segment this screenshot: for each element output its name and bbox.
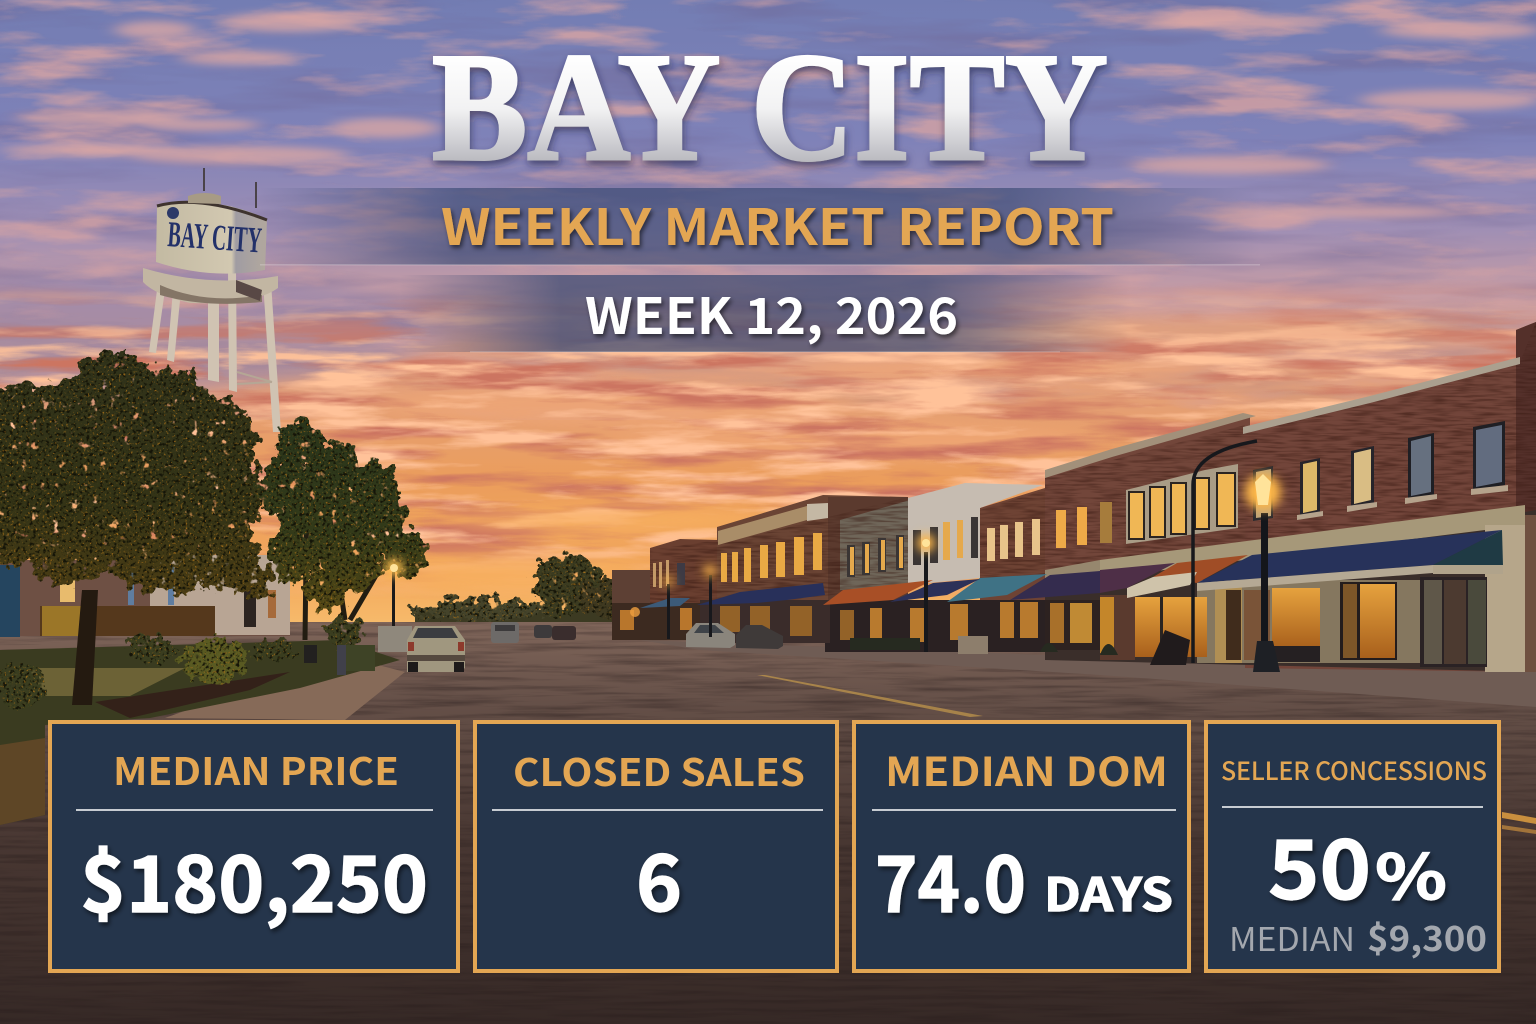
sign block details [718, 503, 828, 582]
week label: WEEK 12, 2026 [585, 277, 958, 349]
value: seller concessions [1268, 804, 1447, 923]
panel: median price [50, 722, 458, 971]
subtitle: WEEKLY MARKET REPORT [441, 188, 1114, 260]
buildings on right [612, 322, 1536, 672]
median concession: $9,300 [1367, 911, 1487, 962]
building: left behind trees [0, 555, 290, 637]
parked cars [686, 623, 783, 649]
title: BAY CITY [432, 21, 1108, 193]
value: median price: $180,250 [80, 823, 428, 935]
water tower [143, 168, 281, 432]
value: median dom: DAYS [1044, 859, 1173, 925]
background: sunset sky [0, 0, 1536, 640]
value: seller concessions: % [1375, 827, 1447, 917]
value: closed sales: 6 [636, 822, 682, 934]
value: median dom: 74.0 [875, 823, 1026, 935]
panel: seller concessions [1206, 722, 1499, 971]
label: median price: MEDIAN PRICE [113, 741, 399, 796]
cars on street [337, 622, 576, 675]
storefront level right [1045, 505, 1536, 672]
panel: closed sales [475, 722, 837, 971]
label: median dom: MEDIAN DOM [885, 740, 1168, 798]
header band: weekly market report [260, 188, 1260, 266]
header band: week [400, 275, 1130, 352]
corner block windows [1243, 357, 1520, 521]
storefronts lower [630, 600, 1100, 652]
median concession [1229, 911, 1487, 962]
far building details [612, 560, 702, 640]
road and ground [0, 622, 1536, 1024]
distant treeline [410, 555, 635, 626]
label: seller concessions: SELLER CONCESSIONS [1221, 752, 1487, 788]
median concession: MEDIAN [1229, 913, 1355, 961]
building walls [612, 322, 1536, 672]
street lamps left [304, 559, 403, 663]
brick texture [650, 322, 1536, 610]
stone and white block details [847, 483, 1043, 585]
value: median dom [875, 823, 1173, 935]
label: closed sales: CLOSED SALES [513, 742, 805, 797]
mid brick details [987, 413, 1256, 561]
trees on left [0, 352, 429, 707]
panel: median dom [854, 722, 1189, 971]
tower lettering: BAY CITY [166, 213, 263, 260]
value: seller concessions: 50 [1268, 804, 1371, 923]
street lamps right [663, 441, 1281, 672]
awnings [640, 530, 1503, 608]
